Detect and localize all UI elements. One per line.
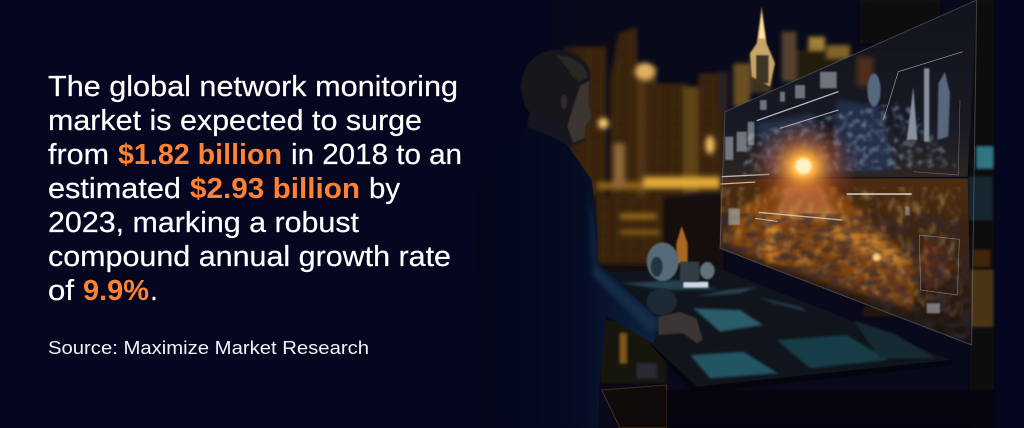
display panel	[720, 0, 977, 345]
line 3	[48, 139, 462, 171]
blurred city skyline	[480, 0, 940, 273]
source line: Source: Maximize Market Research	[48, 337, 369, 358]
drawer under desk	[602, 385, 995, 428]
panel frame lines and text bars	[720, 0, 977, 345]
night sky	[480, 0, 995, 428]
desk rim	[647, 340, 953, 393]
photo left fade	[480, 0, 580, 428]
line 3: in 2018 to an	[291, 139, 462, 171]
data blocks in panel	[725, 72, 940, 313]
small lower panel light	[873, 253, 881, 261]
head and neck	[521, 50, 592, 147]
photo: man at a holographic dashboard overlooking a night city	[480, 0, 995, 428]
burst core	[795, 158, 811, 174]
lower panel gold speckle	[720, 187, 963, 320]
city glow lights	[597, 63, 720, 235]
upper panel speckle	[740, 100, 957, 175]
man in suit	[480, 50, 703, 428]
line 4	[48, 173, 401, 205]
highlight: $2.93 billion: $2.93 billion	[190, 173, 360, 205]
hologram skyline in panel	[907, 68, 950, 142]
glass orbs and cup	[647, 242, 715, 315]
face light	[567, 81, 592, 143]
line 7	[48, 275, 158, 307]
glowing desk circuits	[620, 280, 937, 378]
upper data clouds	[757, 57, 897, 173]
highlight: 9.9%: 9.9%	[83, 275, 149, 307]
right-side building edge	[863, 0, 994, 428]
line 7: of	[48, 275, 74, 307]
dark foreground building	[665, 203, 720, 263]
line 4: estimated	[48, 173, 181, 205]
hair highlight	[555, 55, 588, 82]
sleeve highlight	[588, 187, 657, 333]
neck	[527, 113, 572, 147]
line 5: 2023, marking a robust	[48, 207, 359, 239]
ear	[561, 94, 567, 109]
central light burst	[747, 117, 860, 217]
line 3: from	[48, 139, 109, 171]
line 6: compound annual growth rate	[48, 241, 451, 273]
line 2: market is expected to surge	[48, 105, 422, 137]
skull and hair	[521, 50, 592, 145]
fiery data landscape	[723, 182, 948, 310]
lower panel dark speckle	[720, 213, 972, 345]
jacket	[480, 123, 660, 428]
lower panel	[720, 178, 972, 345]
highlight: $1.82 billion: $1.82 billion	[118, 139, 282, 171]
statistic paragraph	[48, 71, 462, 307]
spire tower	[750, 7, 775, 87]
hand	[658, 312, 703, 343]
glass desk	[608, 242, 953, 393]
upper panel	[721, 0, 977, 178]
panel planet	[867, 73, 881, 107]
line 1: The global network monitoring	[48, 71, 458, 103]
reflections below the skyline	[600, 320, 667, 383]
bright desk reflection	[683, 282, 708, 288]
line 7: .	[150, 275, 158, 307]
line 4: by	[369, 173, 401, 205]
desk surface	[608, 268, 952, 387]
